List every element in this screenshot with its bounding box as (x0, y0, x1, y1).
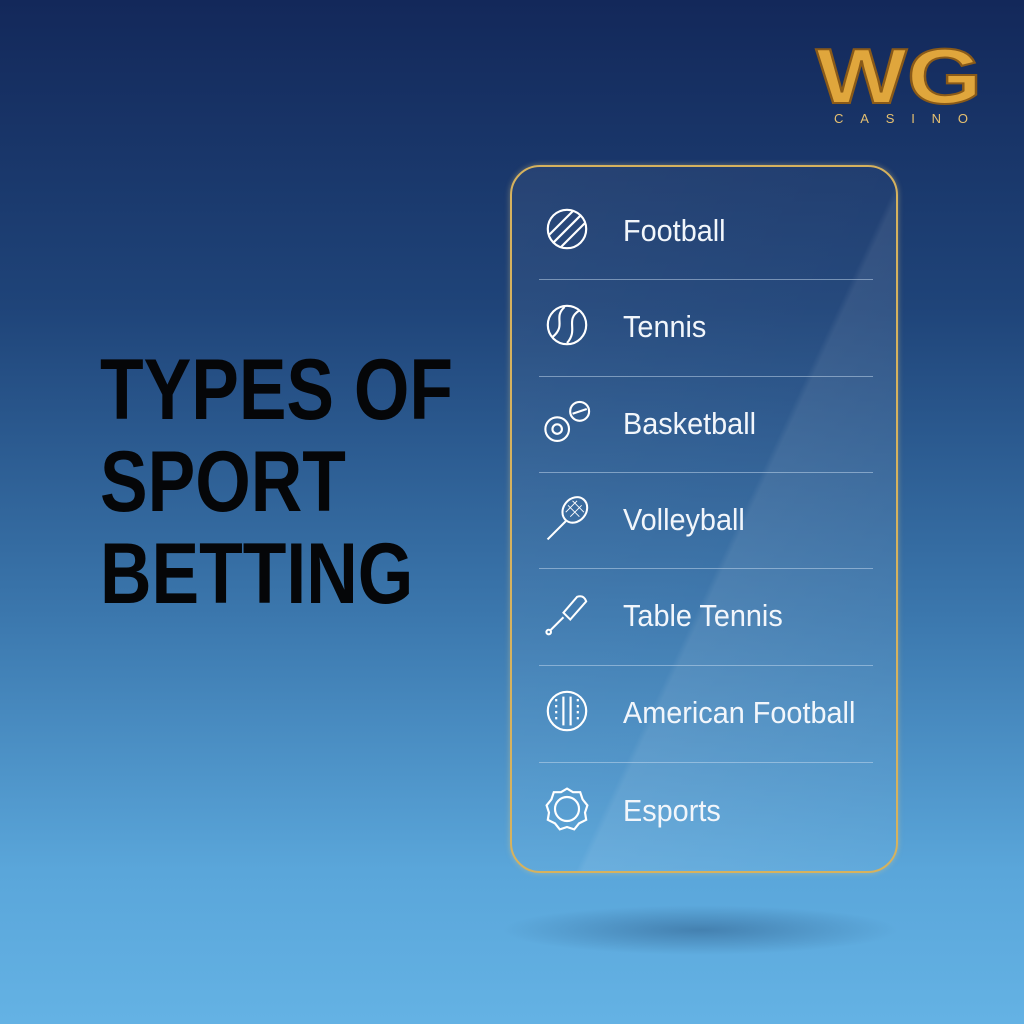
title: TYPES OF (100, 342, 453, 438)
title: SPORT (100, 434, 346, 530)
row: Basketball: Basketball (623, 406, 756, 441)
row: Football: Football (623, 213, 726, 248)
row: Volleyball (546, 496, 745, 540)
title (100, 342, 453, 622)
logo: CASINO (834, 111, 968, 126)
row: Table Tennis (545, 595, 783, 636)
panel: sports list (510, 165, 898, 873)
row: American Football (546, 690, 855, 732)
row: American Football: American Football (623, 695, 855, 730)
row: Football (546, 208, 726, 250)
row: Volleyball: Volleyball (623, 502, 745, 537)
row: Table Tennis: Table Tennis (623, 598, 783, 633)
row: Esports (545, 787, 721, 831)
row: Basketball (544, 400, 756, 442)
row: Esports: Esports (623, 793, 721, 828)
title: BETTING (100, 526, 413, 622)
row: Tennis: Tennis (623, 309, 706, 344)
row: Tennis (546, 304, 706, 346)
panel shadow (500, 905, 900, 955)
logo: WG (816, 32, 982, 120)
